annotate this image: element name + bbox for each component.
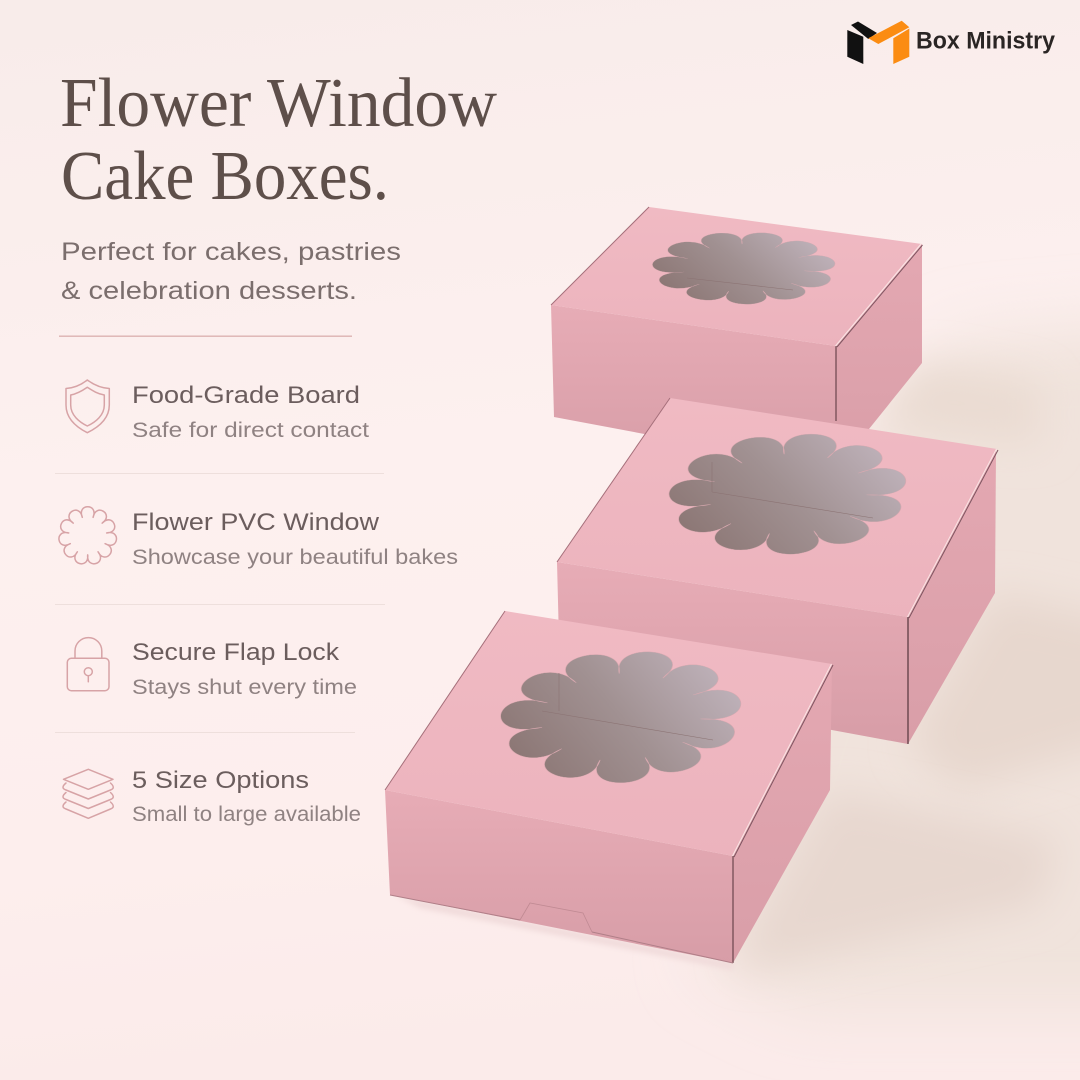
- logo mark: [847, 21, 909, 64]
- subtitle: & celebration desserts.: [61, 277, 357, 305]
- right face: [908, 449, 996, 744]
- title: Flower Window: [60, 65, 497, 142]
- feature text: Safe for direct contact: [132, 418, 369, 442]
- lid: [385, 611, 832, 856]
- box: middle: [557, 398, 998, 744]
- logo: [847, 21, 1056, 64]
- feature: food-grade board: [66, 380, 369, 442]
- feature text: Secure Flap Lock: [132, 639, 340, 666]
- right face: [836, 244, 922, 470]
- feature text: [132, 767, 361, 826]
- logo wordmark: Box Ministry: [916, 28, 1056, 54]
- icon: padlock: [67, 638, 109, 691]
- feature text: Stays shut every time: [132, 675, 357, 699]
- feature text: Flower PVC Window: [132, 509, 379, 536]
- lid: [551, 207, 922, 346]
- subtitle: Perfect for cakes, pastries: [61, 238, 401, 266]
- front face: [385, 790, 733, 963]
- feature text: [132, 382, 369, 442]
- lid: [557, 398, 997, 617]
- box: back: [551, 207, 922, 470]
- feature: flap lock: [67, 638, 357, 699]
- window: [486, 637, 760, 796]
- icon: stacked layers: [63, 769, 113, 818]
- feature text: Small to large available: [132, 802, 361, 826]
- feature text: [132, 639, 357, 699]
- feature text: Food-Grade Board: [132, 382, 360, 409]
- icon: flower: [59, 507, 116, 564]
- front face: [551, 305, 836, 470]
- subtitle: [61, 238, 401, 305]
- tab notch: [520, 903, 592, 932]
- heading divider: [59, 336, 352, 337]
- feature: size options: [63, 767, 361, 826]
- icon: shield: [66, 380, 109, 433]
- box shadows: [395, 320, 1080, 1010]
- box: front: [385, 611, 833, 963]
- right face: [733, 664, 832, 963]
- feature text: 5 Size Options: [132, 767, 309, 794]
- feature text: [132, 509, 458, 569]
- feature text: Showcase your beautiful bakes: [132, 545, 458, 569]
- title: Cake Boxes.: [61, 138, 389, 215]
- title: [60, 65, 497, 215]
- window: [652, 420, 928, 567]
- feature: flower window: [59, 507, 458, 569]
- window: [640, 227, 850, 309]
- front face: [557, 562, 908, 744]
